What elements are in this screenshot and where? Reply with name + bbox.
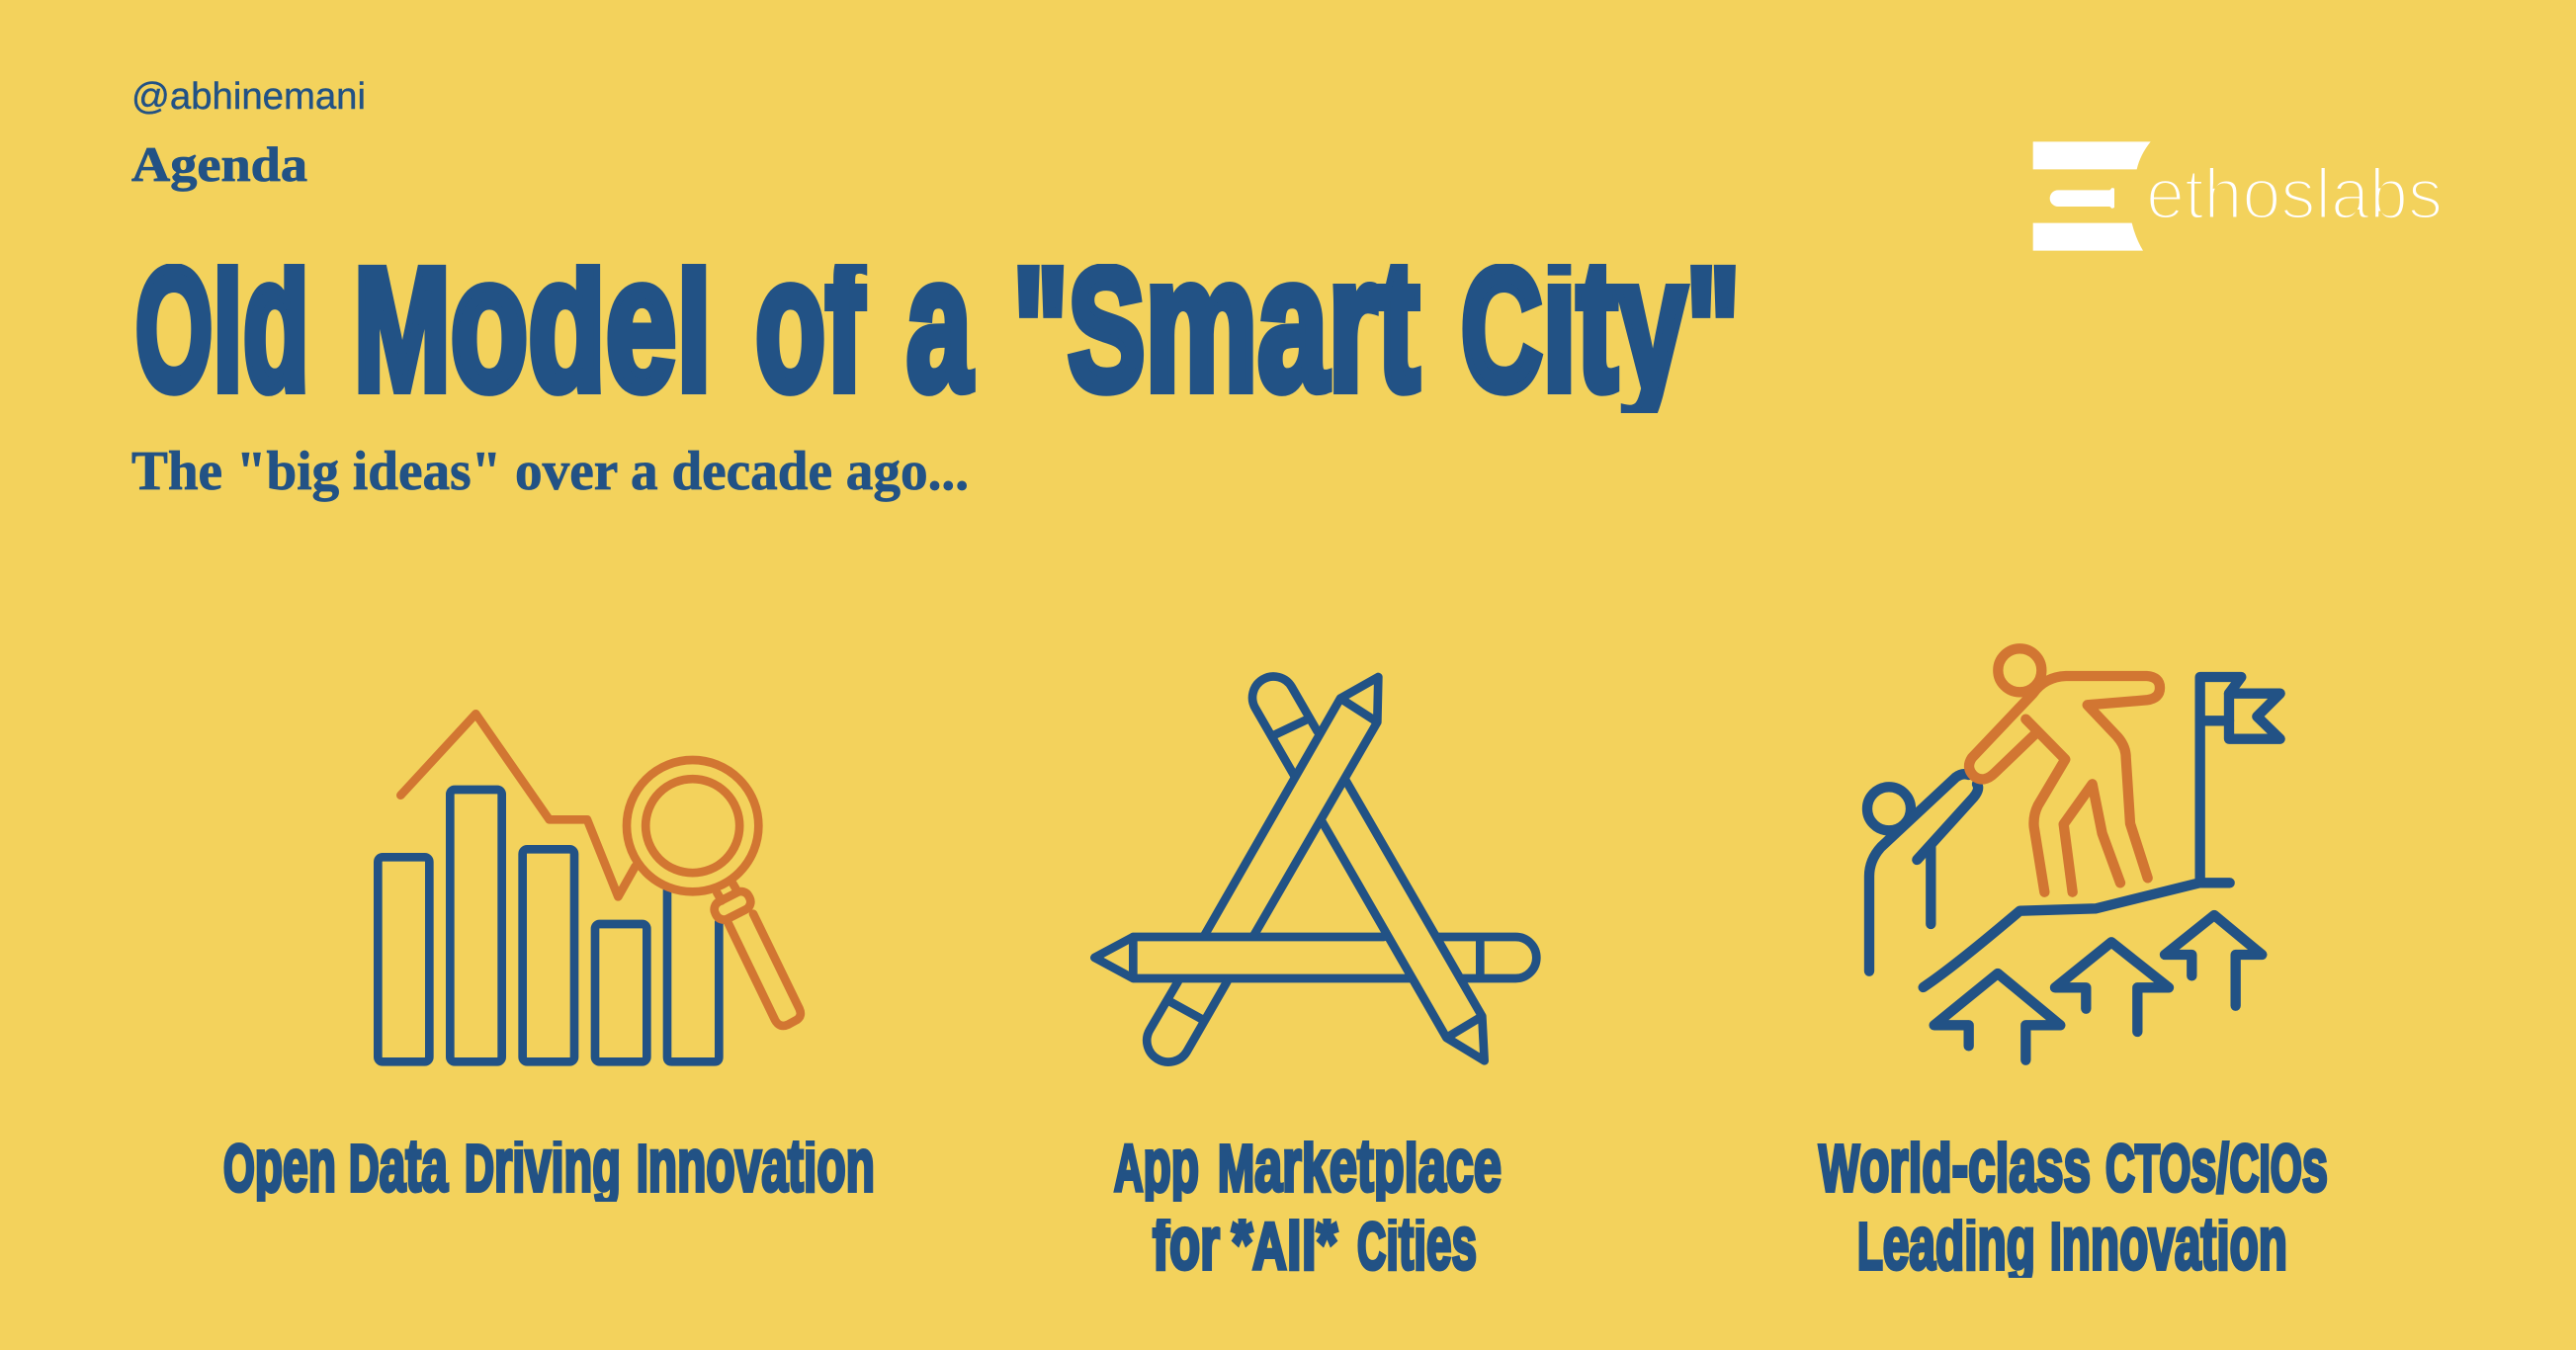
line two: Innovation (2050, 1202, 2287, 1286)
line one: Marketplace (1218, 1124, 1502, 1208)
line two: for (1153, 1202, 1220, 1286)
subtitle: The "big ideas" over a decade ago... (131, 441, 969, 502)
line two: Leading (1857, 1202, 2035, 1286)
title (136, 264, 1736, 413)
caption: open data: Driving (465, 1124, 621, 1208)
bars (378, 790, 719, 1061)
flag and ground (1924, 677, 2280, 987)
title: Old (135, 216, 309, 430)
pencil falling to the right (1252, 677, 1485, 1060)
line one: App (1114, 1124, 1199, 1208)
icon: climbers helping each other up to a flag (1867, 648, 2280, 1060)
logo: ethoslabs (2033, 141, 2443, 251)
author handle: @abhinemani (131, 76, 366, 118)
icon: bar chart with magnifying glass (378, 714, 801, 1061)
title: a (906, 216, 973, 430)
up arrows (1934, 915, 2262, 1060)
line one (1817, 1140, 2327, 1195)
line one (1113, 1140, 1502, 1202)
title: Model (354, 216, 712, 430)
icon: three crossed pencils (1094, 677, 1536, 1062)
line two: *All* (1232, 1202, 1337, 1286)
lower climber (1867, 774, 1978, 971)
logo mark: E (2033, 141, 2151, 251)
caption: open data: Data (349, 1124, 448, 1208)
title: City" (1461, 216, 1740, 430)
line two (1858, 1219, 2285, 1278)
title: "Smart (1013, 216, 1419, 430)
trend line (400, 714, 636, 896)
logo wordmark: ethoslabs (2146, 155, 2443, 234)
caption: app marketplace (1113, 1140, 1502, 1271)
line one: CTOs/CIOs (2105, 1124, 2328, 1208)
caption: CTOs and CIOs (1817, 1140, 2327, 1278)
line two: Cities (1357, 1202, 1477, 1286)
magnifying glass (627, 760, 801, 1026)
caption: open data: Open (223, 1124, 336, 1208)
line two (1153, 1219, 1477, 1271)
line one: World-class (1819, 1124, 2091, 1208)
upper climber (1969, 648, 2160, 892)
section label: Agenda: Agenda (131, 136, 307, 192)
caption: open data: Innovation (637, 1124, 875, 1208)
horizontal pencil (1094, 937, 1536, 978)
caption: open data (223, 1140, 874, 1202)
pencil rising to the right (1147, 677, 1378, 1062)
title: of (755, 216, 864, 430)
